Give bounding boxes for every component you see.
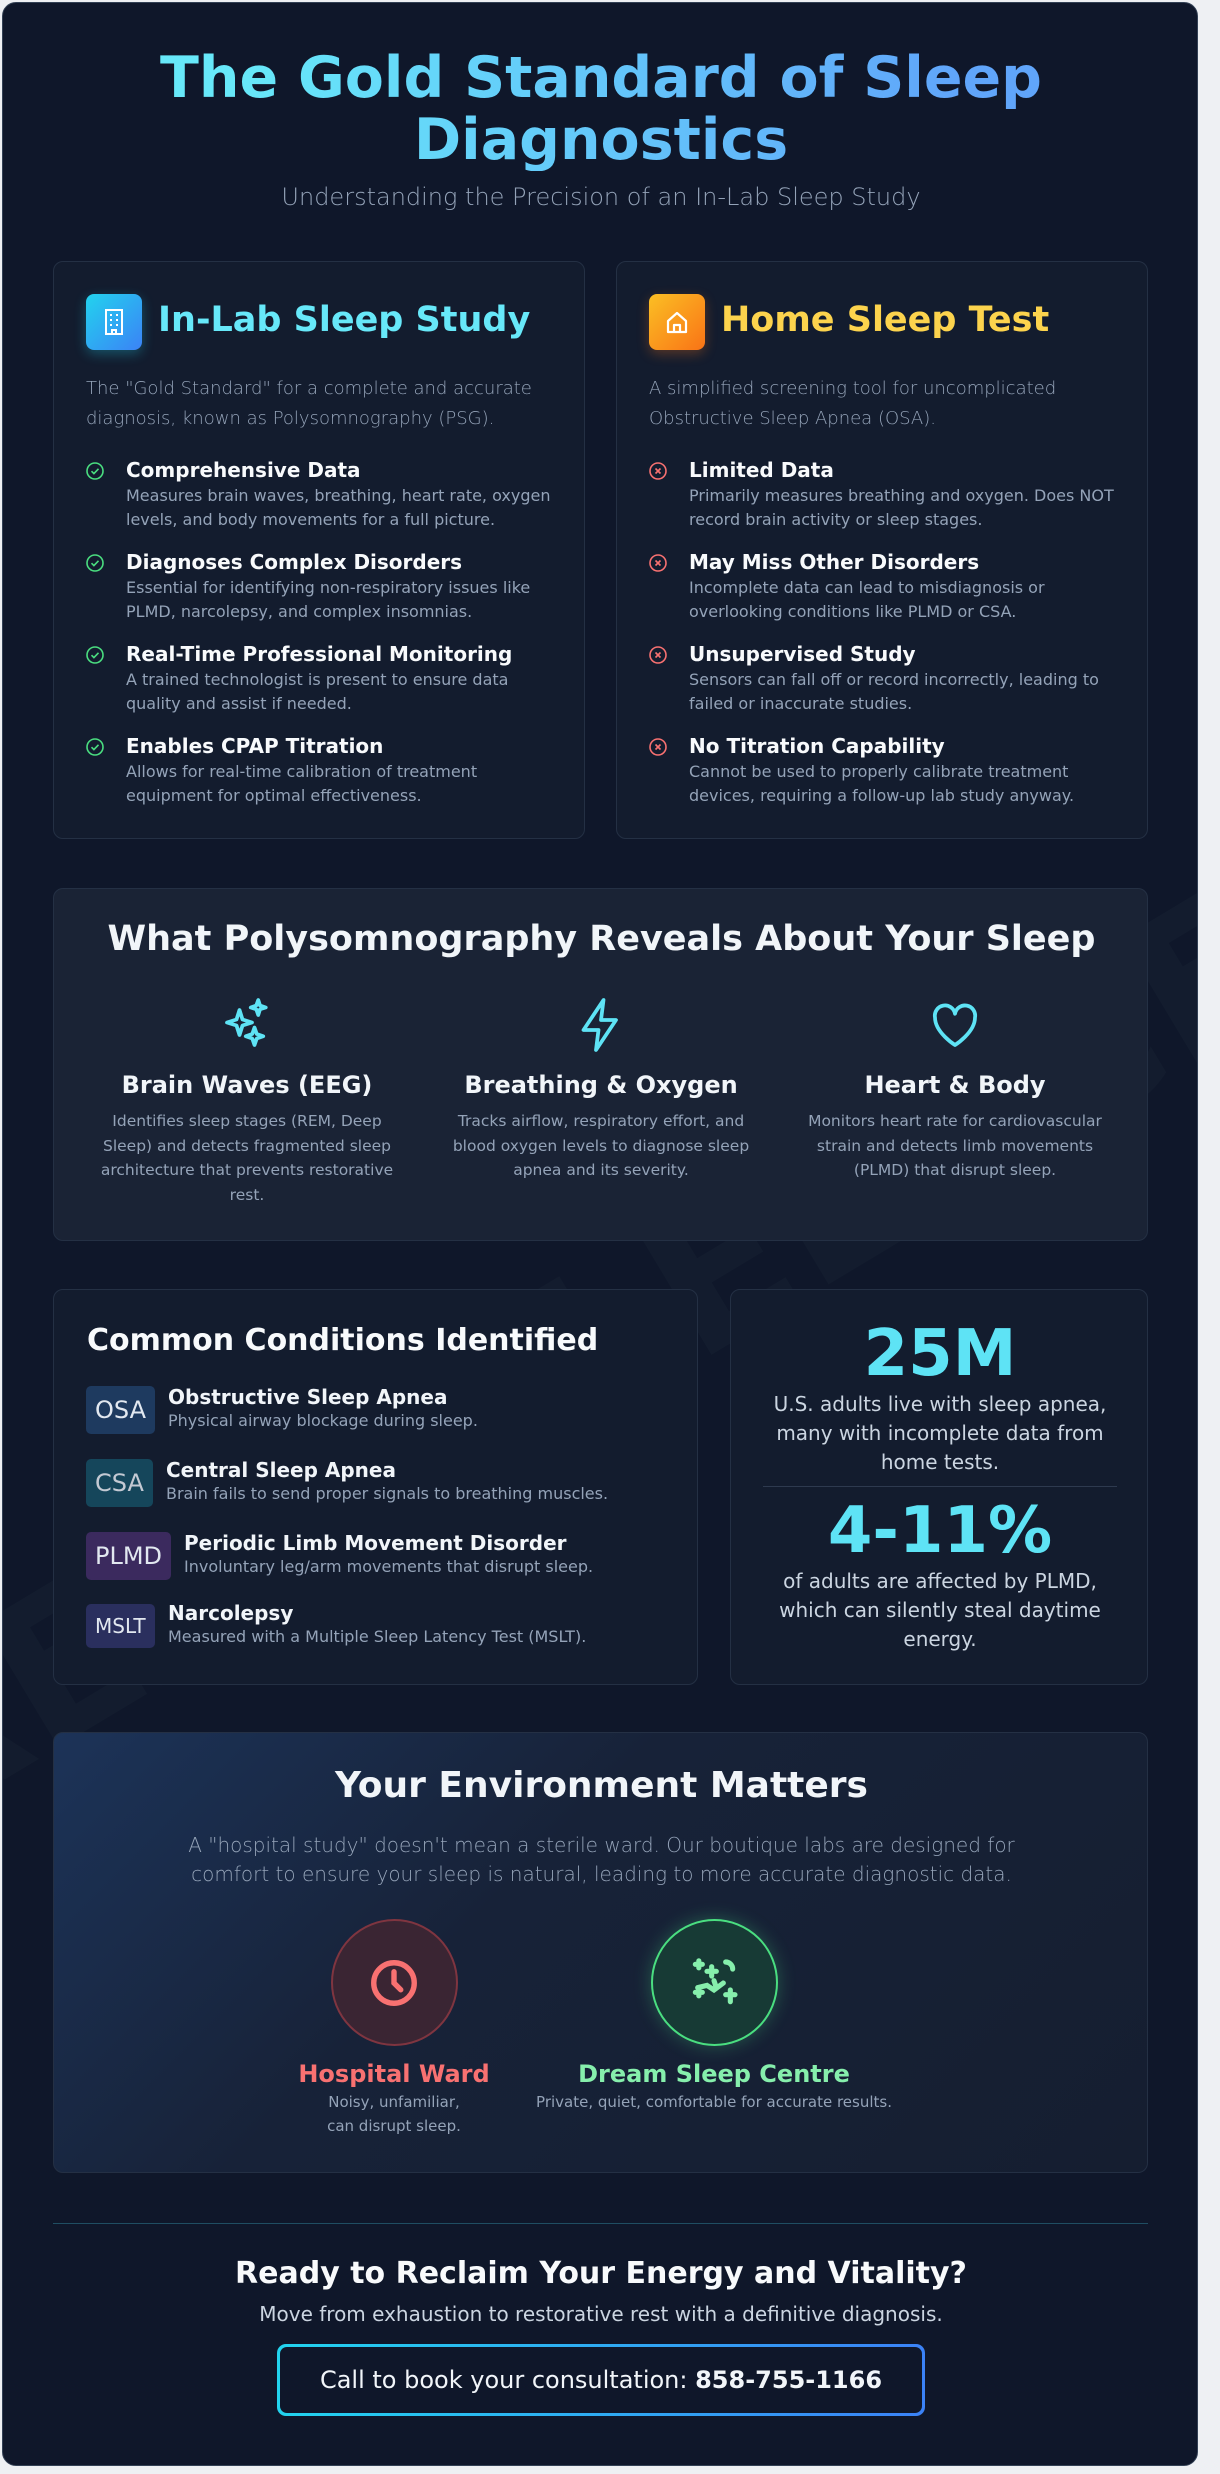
row: PLMD: Periodic Limb Movement Disorder <box>184 1531 567 1555</box>
heading: What Polysomnography Reveals About Your Sleep <box>108 919 1095 959</box>
subtitle: Understanding the Precision of an In-Lab Sleep Study <box>281 183 921 211</box>
row: PLMD: Involuntary leg/arm movements that disrupt sleep. <box>184 1557 593 1576</box>
panel: in-lab sleep study <box>53 261 585 839</box>
panel: stats <box>730 1289 1148 1685</box>
item <box>86 734 477 805</box>
item <box>86 642 512 713</box>
item: Unsupervised Study <box>689 642 916 666</box>
column: brain waves: Identifies sleep stages (REM, Deep Sleep) and detects fragmented sleep architecture that prevents restorative rest. <box>101 1112 393 1204</box>
row: OSA: Physical airway blockage during sleep. <box>168 1411 478 1430</box>
title: The Gold Standard of Sleep <box>160 45 1042 111</box>
stat: 4-11%: 4-11% <box>828 1494 1052 1568</box>
title <box>3 47 1199 171</box>
row: MSLT: MSLT <box>95 1614 146 1638</box>
column: heart <box>808 1004 1102 1179</box>
cta button: Call to book your consultation: 858-755-1166 <box>320 2366 882 2394</box>
title: Diagnostics <box>414 107 788 173</box>
icon: sparkles <box>225 998 268 1047</box>
heading: Your Environment Matters <box>335 1765 868 1806</box>
column: heart: Heart & Body <box>864 1071 1046 1099</box>
row: MSLT <box>86 1601 586 1648</box>
heading: Home Sleep Test <box>721 300 1049 340</box>
icon: building <box>86 294 142 350</box>
stat: 4-11% <box>779 1494 1101 1651</box>
heading: Common Conditions Identified <box>87 1323 598 1358</box>
item: Incomplete data can lead to misdiagnosis or overlooking conditions like PLMD or CSA. <box>689 578 1045 621</box>
cta subtext: Move from exhaustion to restorative rest with a definitive diagnosis. <box>259 2302 943 2326</box>
item <box>649 642 1099 713</box>
item: Primarily measures breathing and oxygen. Does NOT record brain activity or sleep stages. <box>689 486 1114 529</box>
row: OSA: Obstructive Sleep Apnea <box>168 1385 447 1409</box>
stat: 25M: 25M <box>864 1317 1016 1391</box>
item: Diagnoses Complex Disorders <box>126 550 462 574</box>
icon: house <box>649 294 705 350</box>
row: PLMD: PLMD <box>95 1542 162 1570</box>
column: breathing: Breathing & Oxygen <box>464 1071 738 1099</box>
item: A trained technologist is present to ensure data quality and assist if needed. <box>126 670 508 713</box>
icon: sleep <box>650 1919 778 2046</box>
row: OSA: OSA <box>95 1396 146 1424</box>
row: PLMD <box>86 1531 593 1580</box>
description: The "Gold Standard" for a complete and accurate diagnosis, known as Polysomnography (PSG). <box>86 378 532 429</box>
panel: common conditions <box>53 1289 698 1685</box>
column: heart: Monitors heart rate for cardiovascular strain and detects limb movements (PLMD) that disrupt sleep. <box>808 1112 1102 1179</box>
hospital ward: Noisy, unfamiliar, <box>328 2093 460 2111</box>
item <box>649 734 1074 805</box>
item: Limited Data <box>689 458 834 482</box>
hospital ward: can disrupt sleep. <box>327 2117 461 2135</box>
list: limitations <box>649 458 1114 805</box>
list: benefits <box>86 458 550 805</box>
row: OSA <box>86 1385 478 1434</box>
item <box>86 550 530 621</box>
item: Cannot be used to properly calibrate treatment devices, requiring a follow-up lab study anyway. <box>689 762 1074 805</box>
column: breathing <box>453 998 749 1179</box>
icon: heart <box>932 1004 978 1047</box>
column: brain waves <box>101 998 393 1204</box>
item <box>649 550 1045 621</box>
stat: 25M: U.S. adults live with sleep apnea, many with incomplete data from home tests. <box>774 1392 1106 1474</box>
item: Comprehensive Data <box>126 458 361 482</box>
column: breathing: Tracks airflow, respiratory effort, and blood oxygen levels to diagnose sleep apnea and its severity. <box>453 1112 749 1179</box>
hospital ward: Hospital Ward <box>298 2060 490 2088</box>
description: A simplified screening tool for uncomplicated Obstructive Sleep Apnea (OSA). <box>649 378 1056 429</box>
hospital ward <box>298 1919 490 2135</box>
item <box>649 458 1114 529</box>
row: MSLT: Narcolepsy <box>168 1601 293 1625</box>
item: No Titration Capability <box>689 734 945 758</box>
icon: clock <box>330 1919 458 2046</box>
cta button <box>277 2344 925 2416</box>
icon: bolt <box>582 998 618 1052</box>
panel: what polysomnography reveals <box>53 888 1148 1241</box>
text: A "hospital study" doesn't mean a sterile ward. Our boutique labs are designed for comfort to ensure your sleep is natural, leading to more accurate diagnostic data. <box>188 1833 1015 1886</box>
item: Enables CPAP Titration <box>126 734 383 758</box>
row: CSA: Central Sleep Apnea <box>166 1458 396 1482</box>
panel: environment <box>53 1732 1148 2173</box>
row: CSA <box>86 1458 608 1507</box>
row: CSA: Brain fails to send proper signals to breathing muscles. <box>166 1484 608 1503</box>
item: Real-Time Professional Monitoring <box>126 642 512 666</box>
item <box>86 458 550 529</box>
stat: 4-11%: of adults are affected by PLMD, which can silently steal daytime energy. <box>779 1569 1101 1651</box>
column: brain waves: Brain Waves (EEG) <box>122 1071 372 1099</box>
dream sleep centre: Private, quiet, comfortable for accurate results. <box>536 2093 892 2111</box>
row: MSLT: Measured with a Multiple Sleep Latency Test (MSLT). <box>168 1627 586 1646</box>
item: Measures brain waves, breathing, heart rate, oxygen levels, and body movements for a full picture. <box>126 486 550 529</box>
dream sleep centre: Dream Sleep Centre <box>578 2060 850 2088</box>
item: May Miss Other Disorders <box>689 550 979 574</box>
item: Allows for real-time calibration of treatment equipment for optimal effectiveness. <box>126 762 477 805</box>
stat: 25M <box>774 1317 1106 1474</box>
item: Sensors can fall off or record incorrectly, leading to failed or inaccurate studies. <box>689 670 1099 713</box>
item: Essential for identifying non-respiratory issues like PLMD, narcolepsy, and complex insomnias. <box>126 578 530 621</box>
heading: In-Lab Sleep Study <box>158 300 530 340</box>
cta heading: Ready to Reclaim Your Energy and Vitality? <box>235 2256 967 2291</box>
row: CSA: CSA <box>95 1469 144 1497</box>
panel: home sleep test <box>616 261 1148 839</box>
dream sleep centre <box>536 1911 892 2111</box>
